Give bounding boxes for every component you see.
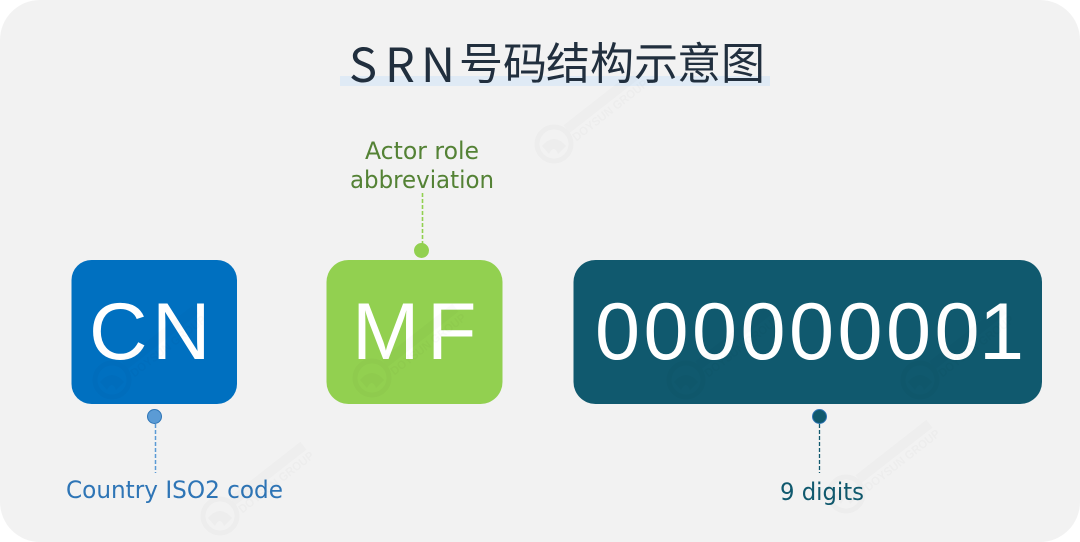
callout: 9 digits [780,410,864,506]
title [340,27,770,96]
callout: actor role abbreviation: abbreviation [350,166,494,194]
callout: country ISO2 code [66,410,283,504]
box: MF actor role [326,260,502,404]
title: 号码结构示意图 [459,28,765,92]
callout: actor role abbreviation [350,137,494,258]
callout: country ISO2 code: Country ISO2 code [66,476,283,504]
box: CN country code: CN [89,287,210,377]
box: 000000001 digits [574,260,1042,404]
callout: actor role abbreviation: Actor role [365,137,479,165]
callout: 9 digits: 9 digits [780,478,864,506]
box: CN country code [72,260,237,404]
box: 000000001 digits: 000000001 [595,287,1024,377]
title: SRN [349,27,455,96]
watermarks [95,70,1017,533]
box: MF actor role: MF [352,287,476,377]
